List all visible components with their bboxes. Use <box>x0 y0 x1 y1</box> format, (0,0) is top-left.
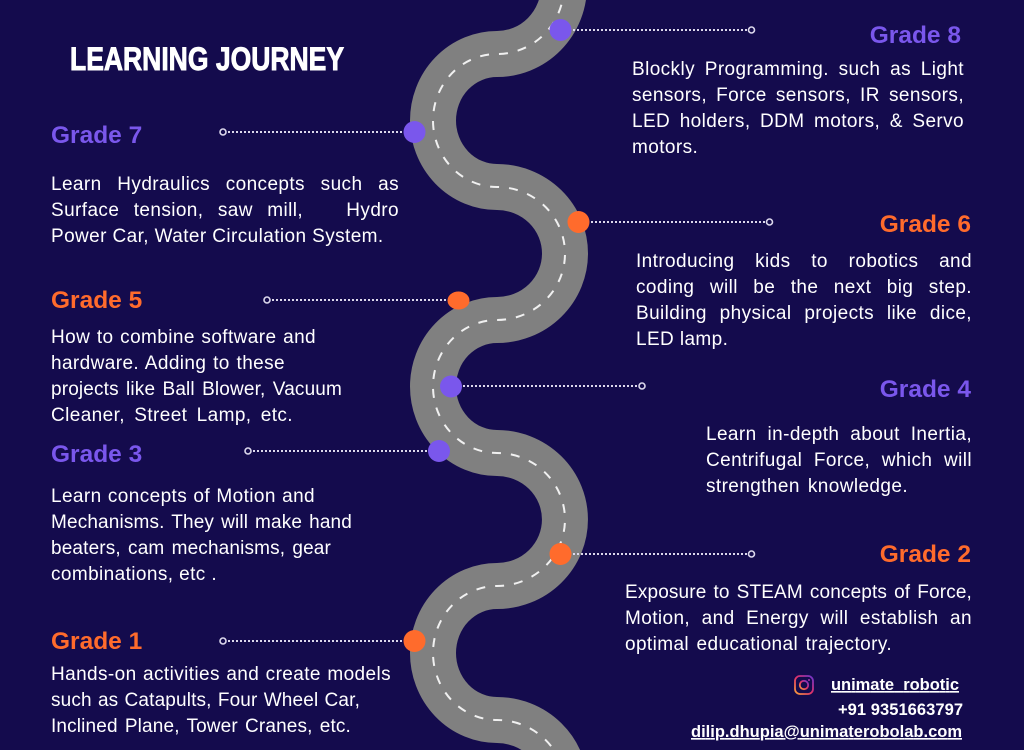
orange markers <box>404 211 590 652</box>
text: Grade 6: coding will be the next big step. <box>636 277 972 298</box>
text: Grade 1: Hands-on activities and create models <box>51 664 391 685</box>
text: Grade 5: hardware. Adding to these <box>51 353 285 374</box>
heading: Grade 7: Grade 7 <box>51 122 142 149</box>
text: Grade 2 <box>625 582 972 655</box>
text: Grade 4: Centrifugal Force, which will <box>706 450 972 471</box>
text: Grade 7: Learn Hydraulics concepts such as <box>51 174 399 195</box>
text: Grade 6: Introducing kids to robotics and <box>636 251 972 272</box>
purple markers <box>404 19 572 462</box>
text: Grade 3: combinations, etc . <box>51 564 217 585</box>
text: Grade 5: Cleaner, Street Lamp, etc. <box>51 405 293 426</box>
text: Grade 3: Learn concepts of Motion and <box>51 486 315 507</box>
heading: Grade 3: Grade 3 <box>51 441 142 468</box>
text: Grade 4: strengthen knowledge. <box>706 476 908 497</box>
text: Grade 8 <box>632 59 964 158</box>
text: Grade 2: Motion, and Energy will establish an <box>625 608 972 629</box>
text: Grade 7 <box>51 174 399 247</box>
text: Grade 5 <box>51 327 342 426</box>
text: Grade 3 <box>51 486 352 585</box>
contact details: dilip.dhupia@unimaterobolab.com <box>691 723 962 741</box>
text: Grade 2: Exposure to STEAM concepts of Force, <box>625 582 972 603</box>
text: Grade 6: Building physical projects like dice, <box>636 303 972 324</box>
contact details <box>691 676 963 741</box>
heading: Grade 1: Grade 1 <box>51 628 142 655</box>
contact details: +91 9351663797 <box>838 701 963 719</box>
text: Grade 7: Power Car, Water Circulation System. <box>51 226 384 247</box>
text: Grade 1: such as Catapults, Four Wheel Car, <box>51 690 360 711</box>
heading: Grade 6: Grade 6 <box>880 211 971 238</box>
text: Grade 2: optimal educational trajectory. <box>625 634 892 655</box>
text: Grade 6 <box>636 251 972 350</box>
text: Grade 1: Inclined Plane, Tower Cranes, etc. <box>51 716 351 737</box>
text: Grade 3: Mechanisms. They will make hand <box>51 512 352 533</box>
text: Grade 5: projects like Ball Blower, Vacuum <box>51 379 342 400</box>
heading: Grade 5: Grade 5 <box>51 287 142 314</box>
contact details: unimate_robotic <box>831 676 959 694</box>
text: Grade 8: motors. <box>632 137 698 158</box>
heading: Grade 8: Grade 8 <box>870 22 961 49</box>
text: Grade 6: LED lamp. <box>636 329 728 350</box>
text: Grade 4: Learn in-depth about Inertia, <box>706 424 972 445</box>
connector lines <box>228 30 765 641</box>
text: Grade 1 <box>51 664 391 737</box>
heading: Grade 2: Grade 2 <box>880 541 971 568</box>
text: Grade 7: Surface tension, saw mill, Hydro <box>51 200 399 221</box>
icon: instagram <box>795 676 813 694</box>
title: LEARNING JOURNEY <box>70 41 344 77</box>
text: Grade 3: beaters, cam mechanisms, gear <box>51 538 331 559</box>
text: Grade 8: LED holders, DDM motors, & Servo <box>632 111 964 132</box>
winding road <box>433 0 565 750</box>
heading: Grade 4: Grade 4 <box>880 376 971 403</box>
text: Grade 4 <box>706 424 972 497</box>
connector end rings <box>220 27 772 644</box>
text: Grade 5: How to combine software and <box>51 327 316 348</box>
text: Grade 8: sensors, Force sensors, IR sensors, <box>632 85 964 106</box>
text: Grade 8: Blockly Programming. such as Light <box>632 59 964 80</box>
